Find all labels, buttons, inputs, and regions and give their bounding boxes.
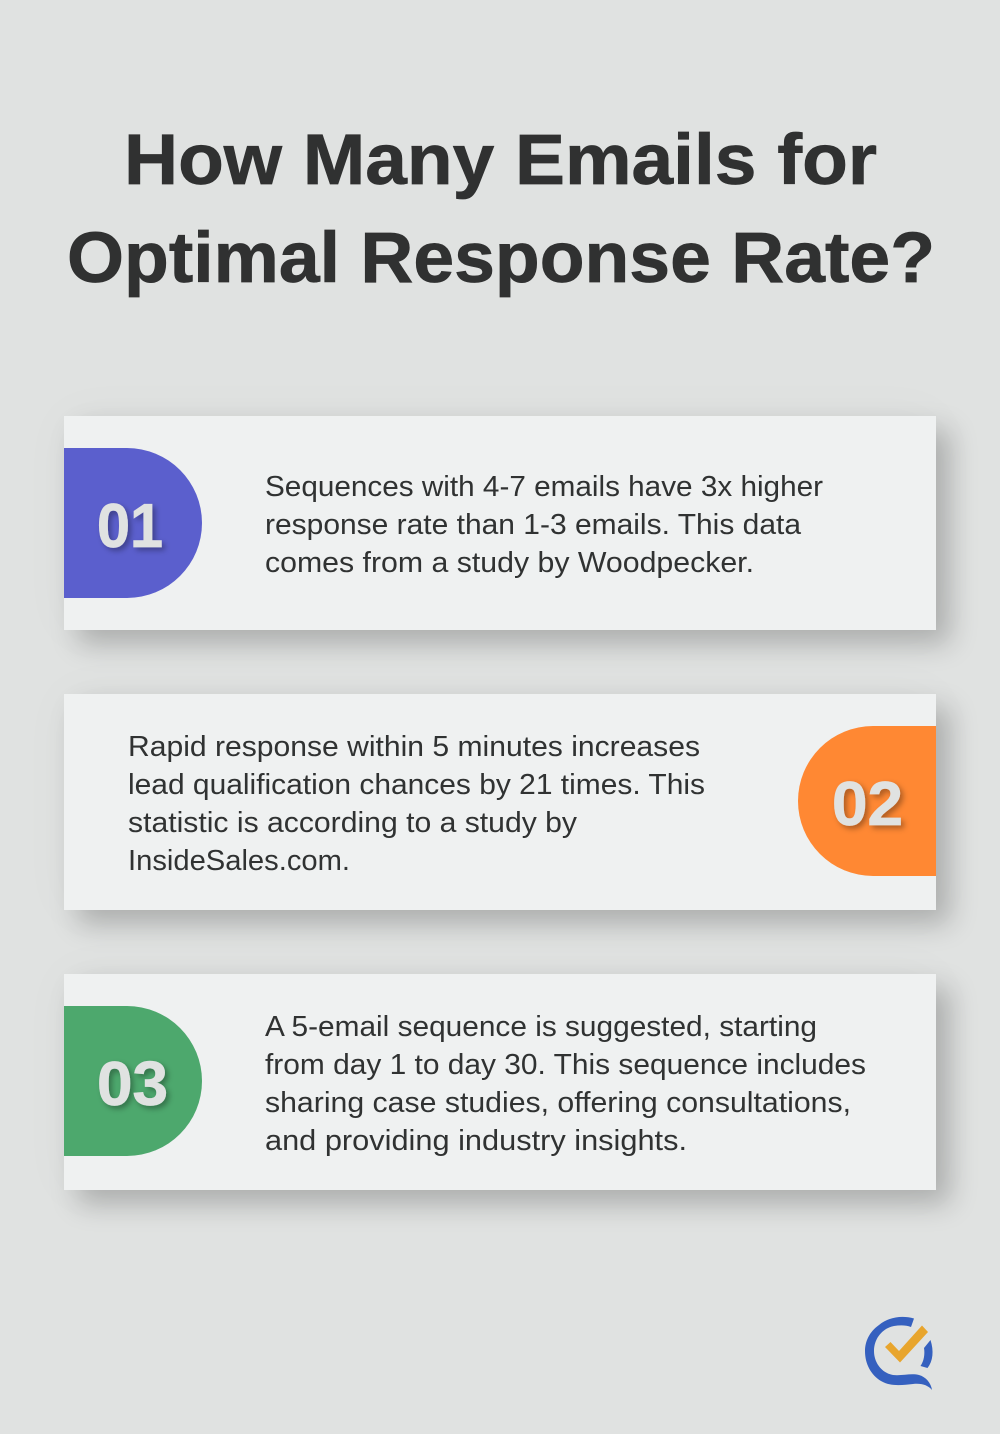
badge 03 bbox=[64, 1006, 202, 1156]
text: card 3: and providing industry insights. bbox=[265, 1125, 687, 1157]
title: Optimal Response Rate? bbox=[67, 219, 935, 298]
text: card 3: A 5-email sequence is suggested, starting bbox=[265, 1011, 817, 1043]
text: card 2: InsideSales.com. bbox=[128, 845, 350, 877]
text: card 1: comes from a study by Woodpecker. bbox=[265, 547, 754, 579]
panel: card 3 bbox=[64, 974, 936, 1190]
text: card 1 bbox=[265, 471, 823, 579]
text: card 1: Sequences with 4-7 emails have 3x higher bbox=[265, 471, 823, 503]
badge 01: 01 bbox=[97, 492, 163, 561]
panel: card 1 bbox=[64, 416, 936, 630]
text: card 2 bbox=[128, 731, 705, 877]
text: card 2: statistic is according to a study by bbox=[128, 807, 578, 839]
text: card 3: sharing case studies, offering consultations, bbox=[265, 1087, 851, 1119]
badge 02 bbox=[798, 726, 936, 876]
text: card 1: response rate than 1-3 emails. This data bbox=[265, 509, 802, 541]
badge 02: 02 bbox=[832, 770, 903, 839]
badge 03: 03 bbox=[97, 1050, 168, 1119]
title bbox=[67, 121, 935, 298]
text: card 3 bbox=[265, 1011, 866, 1157]
badge 01 bbox=[64, 448, 202, 598]
text: card 2: Rapid response within 5 minutes increases bbox=[128, 731, 700, 763]
panel: card 2 bbox=[64, 694, 936, 910]
text: card 2: lead qualification chances by 21 times. This bbox=[128, 769, 705, 801]
text: card 3: from day 1 to day 30. This sequence includes bbox=[265, 1049, 866, 1081]
icon: logo bbox=[865, 1317, 933, 1390]
title: How Many Emails for bbox=[124, 121, 877, 200]
